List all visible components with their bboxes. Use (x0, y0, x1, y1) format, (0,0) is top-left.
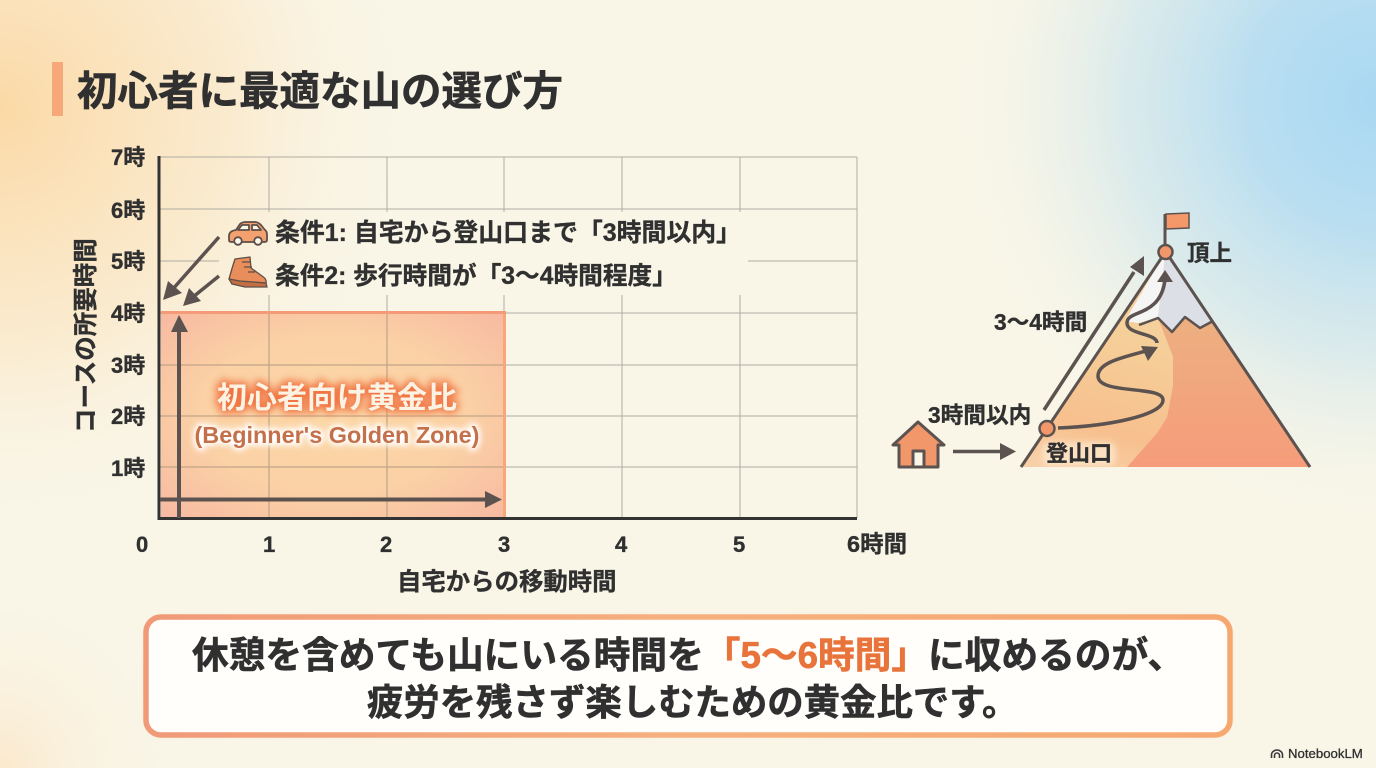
x axis labels: 0 (136, 532, 148, 557)
golden zone (159, 312, 506, 518)
trail arrow (1058, 270, 1173, 428)
zone vertical arrow (171, 315, 188, 518)
label: within 3 hours: 3時間以内 (928, 402, 1031, 428)
icon: house (893, 422, 944, 467)
notebooklm logo: NotebookLM (1288, 746, 1363, 761)
chart grid (159, 157, 857, 518)
x axis title: 自宅からの移動時間 (397, 569, 617, 596)
x axis labels: 6時間 (847, 531, 907, 557)
summit flag (1165, 213, 1189, 244)
x axis labels: 5 (733, 532, 745, 557)
x axis (158, 517, 857, 520)
y axis title: コースの所要時間 (72, 238, 100, 433)
y axis labels: 2時 (111, 404, 145, 429)
title: 初心者に最適な山の選び方 (77, 68, 563, 114)
y axis labels: 7時 (111, 145, 145, 170)
arrow: condition 1 (163, 237, 219, 300)
arrow: home to trailhead (953, 443, 1016, 460)
icon: car (229, 222, 267, 245)
x axis labels (136, 531, 907, 557)
y axis labels: 1時 (111, 456, 145, 481)
x axis labels: 1 (263, 532, 275, 557)
arrow: condition 2 (183, 276, 219, 306)
label: 3-4 hours: 3〜4時間 (994, 309, 1087, 335)
zone horizontal arrow (160, 491, 502, 508)
x axis labels: 3 (498, 532, 510, 557)
zone label: 初心者向け黄金比 (217, 382, 457, 415)
y axis labels: 5時 (111, 249, 145, 274)
y axis labels: 4時 (111, 301, 145, 326)
zone label (195, 382, 479, 448)
callout (146, 617, 1230, 735)
label: trailhead: 登山口 (1046, 441, 1112, 466)
zone label: (Beginner's Golden Zone) (195, 422, 479, 448)
x axis labels: 2 (380, 532, 392, 557)
mountain diagram (893, 213, 1310, 467)
trailhead marker (1040, 421, 1054, 436)
callout line 2: 疲労を残さず楽しむための黄金比です。 (367, 682, 1018, 723)
x axis labels: 4 (615, 532, 628, 557)
y axis labels: 3時 (111, 353, 145, 378)
mountain (1021, 252, 1310, 467)
icon: boot (229, 257, 267, 287)
condition 2: 条件2: 歩行時間が「3〜4時間程度」 (275, 261, 677, 290)
zone label: (Beginner's Golden Zone) (195, 422, 479, 448)
label: summit: 頂上 (1187, 241, 1232, 266)
y axis labels: 6時 (111, 198, 145, 223)
chart (72, 145, 907, 596)
arrow: 3-4 hours (1044, 256, 1144, 410)
zone label: 初心者向け黄金比 (217, 382, 457, 415)
condition 1: 条件1: 自宅から登山口まで「3時間以内」 (275, 219, 741, 247)
y axis (158, 156, 160, 520)
summit marker (1158, 245, 1172, 259)
y axis labels (111, 145, 145, 481)
callout line 1: 休憩を含めても山にいる時間を「5〜6時間」に収めるのが、 (192, 635, 1184, 676)
